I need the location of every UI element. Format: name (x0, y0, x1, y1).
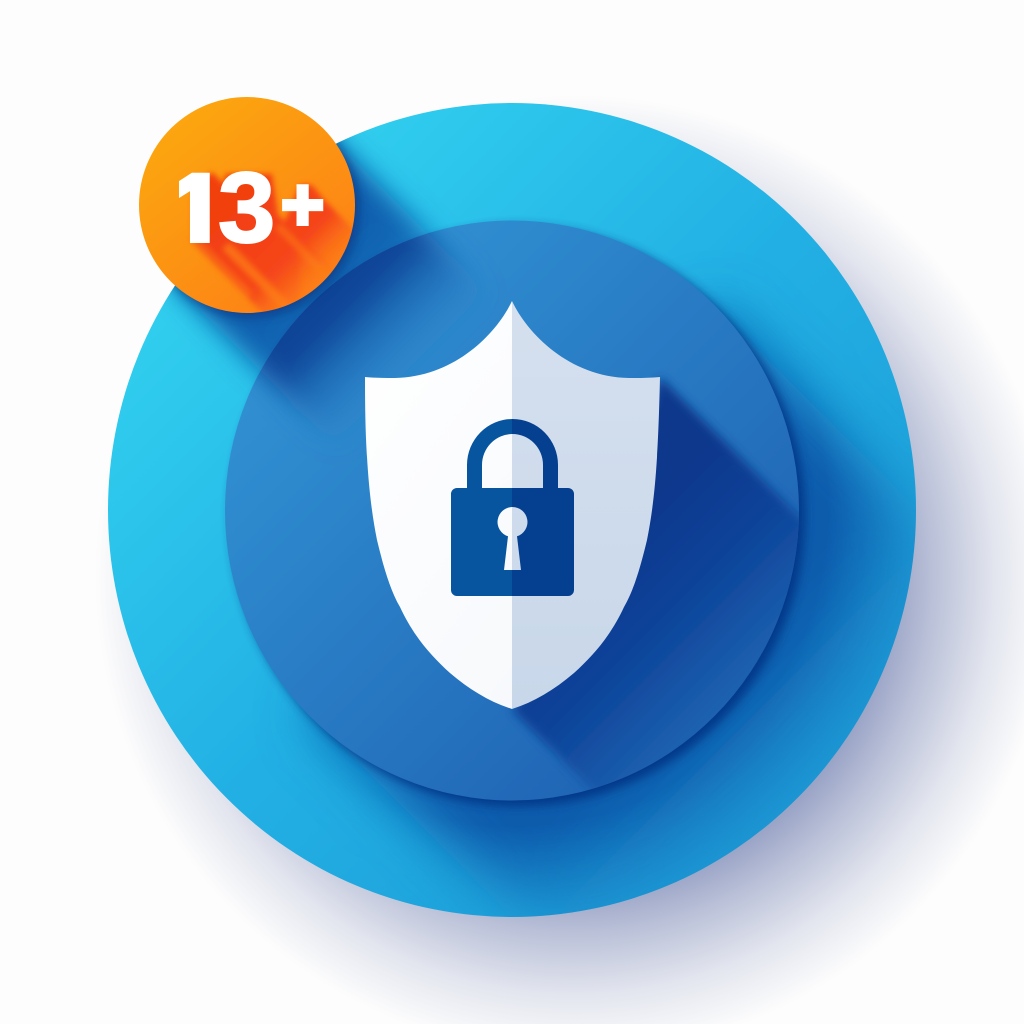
padlock dark half (512, 419, 574, 596)
shield (365, 301, 660, 709)
13+ label (179, 171, 324, 244)
outer circle (108, 103, 916, 917)
long shadow of shield (510, 376, 799, 788)
badge contact shadow (172, 141, 362, 321)
digit 3: 3 (218, 151, 275, 264)
plus sign: + (281, 163, 324, 246)
badge: 13+ (139, 97, 370, 320)
long shadow of 13+ text (189, 170, 353, 312)
shield shaded half (512, 301, 660, 709)
padlock light half (451, 419, 512, 596)
long shadow of badge (166, 135, 442, 386)
badge shadow on inner circle (254, 230, 465, 424)
icon: padlock (451, 419, 574, 596)
inner circle contact shadow (231, 226, 805, 806)
inner circle (225, 220, 799, 800)
long shadow of inner circle (288, 286, 916, 917)
digit 1: 1 (163, 148, 231, 284)
